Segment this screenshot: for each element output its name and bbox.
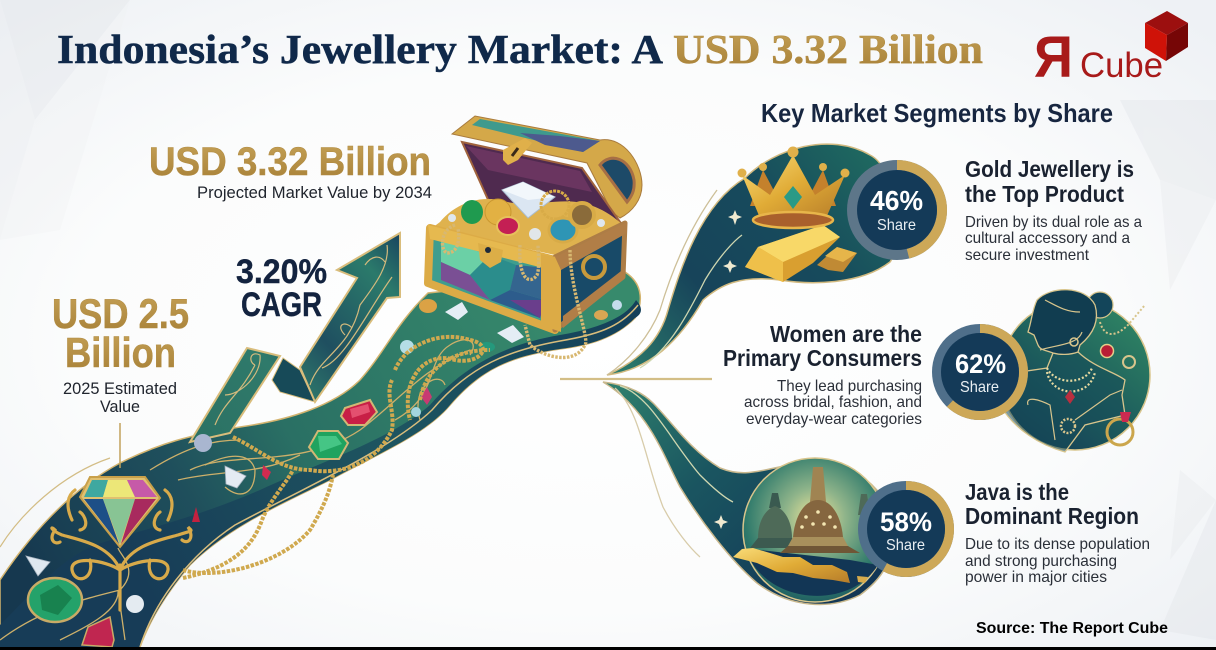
stat: USD 2.5 Billion estimated [52,290,189,468]
gold chains [183,337,490,578]
text: gold jewellery: Gold Jewellery is [965,156,1134,182]
text: java region: Java is the [965,479,1069,505]
text: gold jewellery: secure investment [965,247,1090,264]
chest side [555,223,625,330]
text: java region [965,479,1150,586]
chest jewels [448,182,605,242]
donut: 62%: 62% [955,349,1006,379]
text: gold jewellery: the Top Product [965,181,1124,207]
text: java region: and strong purchasing [965,553,1117,570]
donut: 62%: Share [960,379,999,396]
text: gold jewellery [965,156,1142,264]
panel: java region [733,458,1150,602]
chest lid [452,116,642,226]
stat: USD 3.32 Billion projected [149,140,432,202]
text: women consumers: across bridal, fashion, and [744,394,922,411]
logo: RCube: Cube [1080,46,1163,85]
text: women consumers: Women are the [770,321,922,347]
ring handle [583,256,605,278]
title: USD 3.32 Billion [673,26,983,72]
gems on ribbon [26,299,622,647]
donut: 62% [932,324,1028,420]
stat: USD 2.5 Billion estimated: Value [100,397,140,416]
chest treasure mound [432,199,622,255]
stat: 3.20% CAGR: CAGR [241,286,322,324]
text: women consumers [723,321,922,428]
treasure chest [428,116,642,358]
ribbon path [0,272,641,647]
text: women consumers: everyday-wear categories [746,411,922,428]
stat: USD 2.5 Billion estimated: Billion [65,329,176,376]
text: gold jewellery: cultural accessory and a [965,230,1130,247]
stat: USD 2.5 Billion estimated: 2025 Estimated [63,379,177,398]
text: gold jewellery: Driven by its dual role as a [965,214,1142,231]
text: women consumers: Primary Consumers [723,345,922,371]
icon: temple and Java island [733,458,887,602]
donut: 46%: Share [877,217,916,234]
rising arrow [190,233,400,442]
donut: 58% [858,481,954,577]
lock [478,243,503,268]
text: women consumers: They lead purchasing [777,378,922,395]
icon: rainbow diamond [80,477,160,547]
gold filigree [52,490,191,610]
hanging pearl chain [442,225,586,358]
stat: 3.20% CAGR [236,253,327,324]
icon: woman with jewellery [1000,290,1150,452]
heading: key market segments: Key Market Segments by Share [761,98,1113,128]
source note: Source: The Report Cube [976,620,1168,637]
donut: 46% [847,160,947,260]
text: java region: Dominant Region [965,503,1139,529]
chest front facets [441,240,547,318]
icon: crown and gold bars [738,146,857,282]
stat: 3.20% CAGR: 3.20% [236,253,327,291]
chest rim [428,222,627,332]
stat: USD 3.32 Billion projected: Projected Market Value by 2034 [197,183,432,202]
chest front [428,228,555,330]
text: java region: power in major cities [965,569,1107,586]
title [57,26,983,72]
panel: gold jewellery [738,146,1142,282]
stat: USD 2.5 Billion estimated: USD 2.5 [52,290,189,337]
text: java region: Due to its dense population [965,536,1150,553]
logo: RCube [1034,11,1188,90]
donut: 46%: 46% [870,185,923,216]
title: Indonesia’s Jewellery Market: A [57,26,663,72]
stat: USD 3.32 Billion projected: USD 3.32 Billion [149,140,431,184]
donut: 58%: 58% [880,507,932,537]
donut: 58%: Share [886,537,925,554]
panel: women consumers [723,290,1150,452]
connector streams [560,144,896,604]
logo: RCube: Я [1034,25,1073,90]
